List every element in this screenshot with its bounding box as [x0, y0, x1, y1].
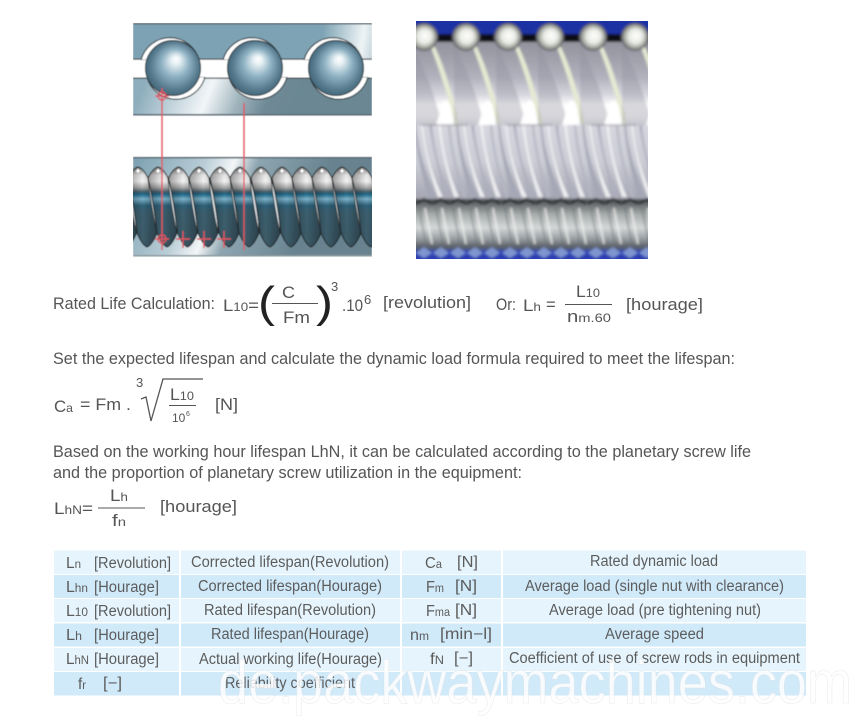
- row 2: Average load (single nut with clearance): [525, 578, 784, 595]
- Lh formula: [496, 282, 703, 326]
- row 2: [Hourage]: [94, 579, 159, 596]
- formula: LhN: Lh: [110, 486, 128, 505]
- formula: LhN: [hourage]: [160, 497, 237, 516]
- Lh formula: [hourage]: [626, 295, 703, 314]
- row 3: [Revolution]: [94, 603, 171, 620]
- row 3: L10: [66, 603, 88, 620]
- formula row: rated life calculation: [53, 278, 703, 327]
- formula: dynamic load Ca: 3: [136, 375, 143, 390]
- row 6: [−]: [103, 675, 122, 692]
- row 3: [N]: [455, 602, 477, 619]
- row 4: [Hourage]: [94, 627, 159, 644]
- row 6: Reliability coefficient: [225, 675, 356, 692]
- L10 formula: [223, 278, 471, 327]
- formula: dynamic load Ca: [N]: [215, 395, 238, 414]
- row 2: [N]: [455, 578, 477, 595]
- formula: LhN: LhN=: [54, 499, 93, 518]
- formula: LhN: [54, 486, 237, 530]
- text: expected lifespan sentence: Set the expected lifespan and calculate the dynamic load formula required to meet the lifespan:: [53, 349, 735, 368]
- text: working hour lifespan paragraph: and the proportion of planetary screw utilization in the equipment:: [53, 463, 522, 482]
- L10 formula: [revolution]: [383, 293, 471, 312]
- row 4: nm: [410, 627, 429, 644]
- row 4: Lh: [66, 627, 82, 644]
- row 3: Rated lifespan(Revolution): [204, 602, 376, 619]
- row 5: [54, 648, 806, 671]
- formula: dynamic load Ca: Ca: [54, 397, 73, 416]
- L10 formula: (: [258, 278, 275, 327]
- row 1: Rated dynamic load: [590, 553, 718, 570]
- label: Rated Life Calculation:: [53, 294, 215, 313]
- row 3: [54, 599, 806, 622]
- Lh formula: Or:: [496, 295, 516, 314]
- formula: dynamic load Ca: 10: [172, 411, 186, 425]
- formula: dynamic load Ca: 6: [186, 411, 190, 418]
- row 5: Coefficient of use of screw rods in equipment: [509, 650, 801, 667]
- L10 formula: Fm: [283, 308, 310, 327]
- formula: LhN: fn: [112, 511, 126, 530]
- row 4: Average speed: [605, 626, 704, 643]
- upper raceway stripes: [410, 42, 669, 126]
- row 1: [N]: [457, 554, 478, 571]
- ball 3: [308, 40, 364, 96]
- L10 formula: .10: [342, 296, 363, 315]
- row 1: Ca: [425, 555, 443, 572]
- text: working hour lifespan paragraph: [53, 442, 751, 482]
- row 4: Rated lifespan(Hourage): [211, 626, 369, 643]
- image: screw and nut raceway photo: [416, 21, 648, 259]
- red pitch markers: [155, 88, 244, 250]
- Lh formula: nm.60: [567, 307, 611, 326]
- row 5: [−]: [454, 650, 473, 667]
- row 6: [54, 672, 806, 696]
- L10 formula: 3: [331, 279, 338, 294]
- row 1: Ln: [66, 555, 81, 572]
- L10 formula: ): [316, 278, 333, 327]
- row 1: [Revolution]: [94, 555, 171, 572]
- table: symbols and definitions: [54, 550, 806, 696]
- row 1: [54, 550, 806, 574]
- lower screw thread: [416, 196, 648, 259]
- black retainer bar: [410, 34, 655, 42]
- ball 1: [146, 40, 200, 96]
- Lh formula: Lh: [523, 296, 541, 315]
- row 3: Average load (pre tightening nut): [549, 602, 761, 619]
- ball 2: [228, 40, 282, 96]
- formula: dynamic load Ca: = Fm .: [80, 395, 131, 414]
- blue top strip: [416, 21, 648, 36]
- row 1: Corrected lifespan(Revolution): [191, 554, 389, 571]
- row 4: [54, 624, 806, 646]
- row 2: Fm: [426, 579, 444, 596]
- middle fine stripes: [416, 123, 648, 200]
- row 2: Lhn: [66, 579, 88, 596]
- row 3: Fma: [426, 603, 451, 620]
- formula: dynamic load Ca: L10: [170, 385, 194, 404]
- lower threaded screw band: [133, 156, 372, 257]
- row 5: LhN: [66, 651, 89, 668]
- L10 formula: C: [282, 283, 295, 302]
- image: ball screw cross-section: [133, 23, 372, 257]
- row 5: Actual working life(Hourage): [199, 651, 382, 668]
- formula: dynamic load Ca: [54, 375, 238, 425]
- top nut band with ball bearings: [133, 23, 372, 116]
- row 4: [min−l]: [440, 626, 492, 643]
- text: working hour lifespan paragraph: Based on the working hour lifespan LhN, it can be calculated according to the planetary screw life: [53, 442, 751, 461]
- row 2: Corrected lifespan(Hourage): [198, 578, 382, 595]
- row 2: [54, 575, 806, 598]
- row 5: [Hourage]: [94, 651, 159, 668]
- row 6: fr: [78, 676, 86, 693]
- row of balls: [410, 23, 649, 51]
- row 5: fN: [430, 651, 444, 668]
- Lh formula: L10: [576, 282, 600, 301]
- L10 formula: L10=: [223, 296, 259, 315]
- Lh formula: =: [546, 295, 556, 314]
- L10 formula: 6: [364, 292, 371, 307]
